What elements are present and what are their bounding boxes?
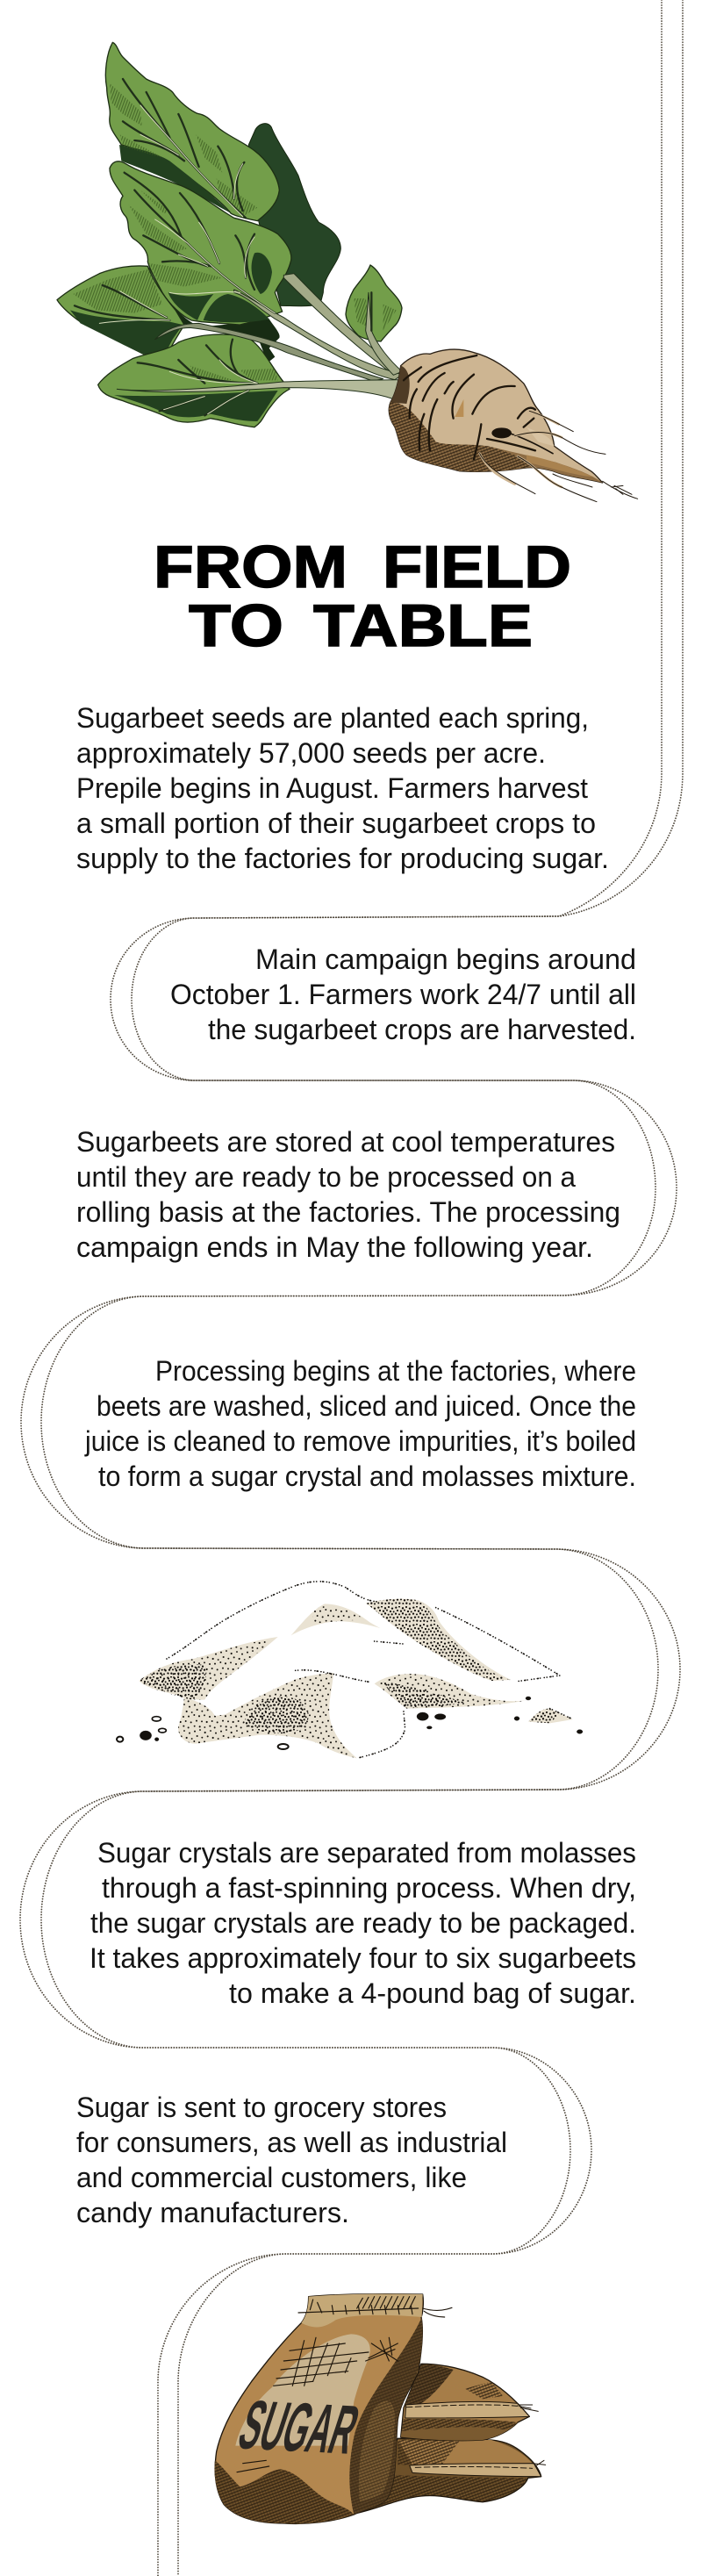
icon: small leaf xyxy=(346,265,402,341)
text block: processing xyxy=(84,1355,636,1492)
text block: planting: Sugarbeet seeds are planted each spring, xyxy=(76,702,589,734)
icon: sugar sacks illustration: SUGAR xyxy=(230,2386,368,2469)
title: TO xyxy=(189,592,283,659)
text block: separating crystals: to make a 4-pound bag of sugar. xyxy=(229,1977,636,2009)
icon: sugar pile illustration xyxy=(117,1582,583,1758)
text block: planting: a small portion of their sugarbeet crops to xyxy=(76,807,596,839)
title: FIELD xyxy=(383,534,571,600)
text block: storage: rolling basis at the factories. The processing xyxy=(76,1196,620,1228)
text block: processing: beets are washed, sliced and juiced. Once the xyxy=(97,1390,636,1422)
icon: sugar sacks illustration xyxy=(214,2294,546,2523)
text block: storage: until they are ready to be processed on a xyxy=(76,1161,576,1193)
text block: planting: Prepile begins in August. Farmers harvest xyxy=(76,772,588,804)
text block: separating crystals xyxy=(90,1837,636,2009)
text block: distribution xyxy=(76,2092,507,2228)
text block: main campaign: the sugarbeet crops are harvested. xyxy=(208,1014,636,1045)
text block: planting xyxy=(76,702,609,874)
text block: planting: approximately 57,000 seeds per acre. xyxy=(76,737,546,769)
text block: distribution: Sugar is sent to grocery stores xyxy=(76,2092,447,2123)
text block: storage: campaign ends in May the following year. xyxy=(76,1231,593,1263)
text block: main campaign: Main campaign begins around xyxy=(255,944,636,975)
text block: distribution: and commercial customers, like xyxy=(76,2162,467,2193)
title: FROM xyxy=(154,534,347,600)
text block: distribution: for consumers, as well as industrial xyxy=(76,2127,507,2158)
text block: planting: supply to the factories for producing sugar. xyxy=(76,843,609,874)
text block: processing: to form a sugar crystal and molasses mixture. xyxy=(98,1460,636,1492)
text block: processing: Processing begins at the factories, where xyxy=(155,1355,636,1387)
text block: separating crystals: It takes approximately four to six sugarbeets xyxy=(90,1942,636,1974)
title: TABLE xyxy=(313,592,533,659)
icon: sugarbeet root xyxy=(389,349,638,502)
text block: processing: juice is cleaned to remove impurities, it’s boiled xyxy=(84,1425,636,1457)
text block: storage: Sugarbeets are stored at cool temperatures xyxy=(76,1126,615,1158)
icon: sugarbeet leaves xyxy=(57,42,402,427)
text block: main campaign xyxy=(170,944,636,1045)
title xyxy=(154,534,571,659)
text block: distribution: candy manufacturers. xyxy=(76,2197,349,2228)
text block: separating crystals: through a fast-spinning process. When dry, xyxy=(102,1872,636,1904)
text block: separating crystals: Sugar crystals are separated from molasses xyxy=(97,1837,636,1869)
text block: separating crystals: the sugar crystals are ready to be packaged. xyxy=(90,1907,636,1939)
text block: storage xyxy=(76,1126,620,1263)
text block: main campaign: October 1. Farmers work 24/7 until all xyxy=(170,979,636,1010)
